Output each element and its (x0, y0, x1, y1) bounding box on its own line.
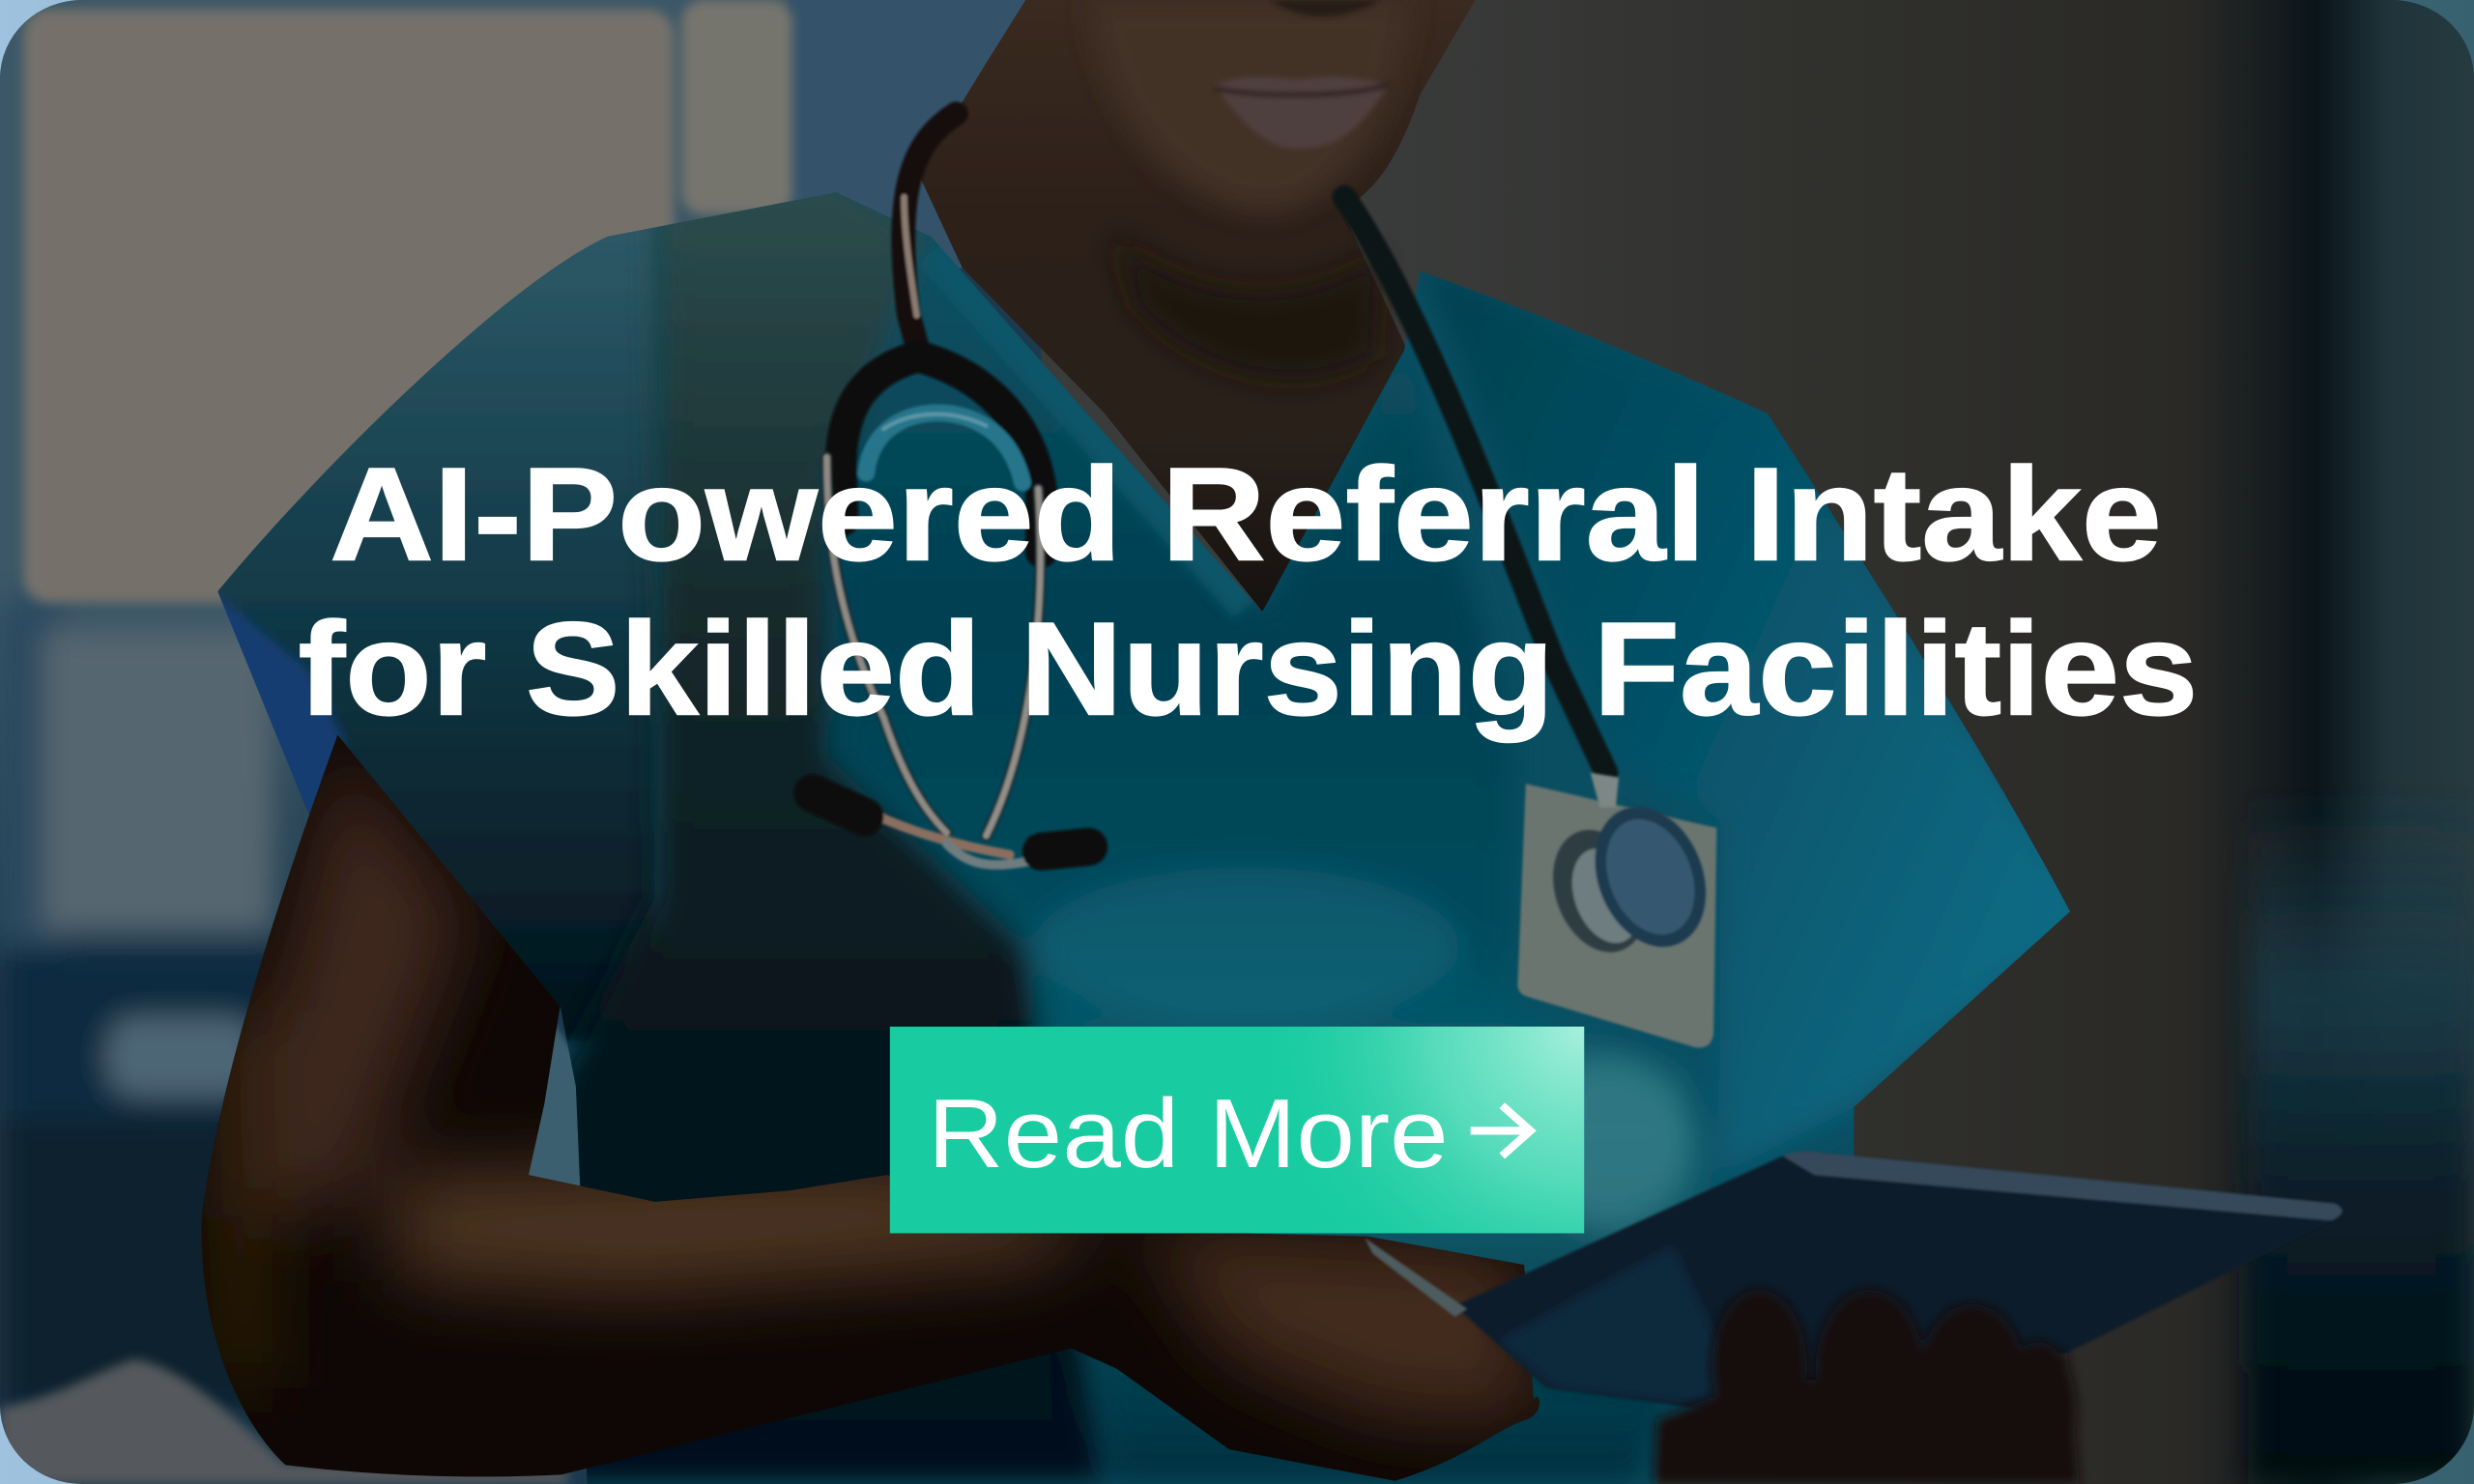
tablet (1454, 1151, 2343, 1412)
tablet and hands (1454, 1151, 2343, 1412)
sleeve left (218, 228, 657, 1047)
chest piece (1552, 771, 1708, 954)
olive side panel (552, 174, 1105, 1484)
sleeve blue edge (218, 591, 349, 815)
lit belly and lower hem (1033, 868, 1459, 1025)
title: AI-Powered Referral Intake (330, 441, 2162, 588)
gap behind elbow (529, 1025, 580, 1186)
arm and left hand (189, 726, 1546, 1484)
button label: Read More (928, 1079, 1449, 1188)
scrub top (158, 174, 2098, 1484)
left collar band (931, 252, 1247, 607)
stethoscope (813, 114, 1606, 865)
title (299, 441, 2198, 743)
face and neck (918, 0, 1476, 621)
chest and belly (836, 221, 1720, 1484)
icon: arrow (1471, 1105, 1531, 1156)
read more button (890, 1027, 1584, 1233)
id badge (1517, 784, 1716, 1047)
title: for Skilled Nursing Facilities (299, 595, 2198, 743)
lips (1215, 0, 1389, 149)
pen (1365, 1238, 1467, 1317)
right hand (1654, 1290, 2080, 1484)
right chest (1420, 260, 2098, 1175)
